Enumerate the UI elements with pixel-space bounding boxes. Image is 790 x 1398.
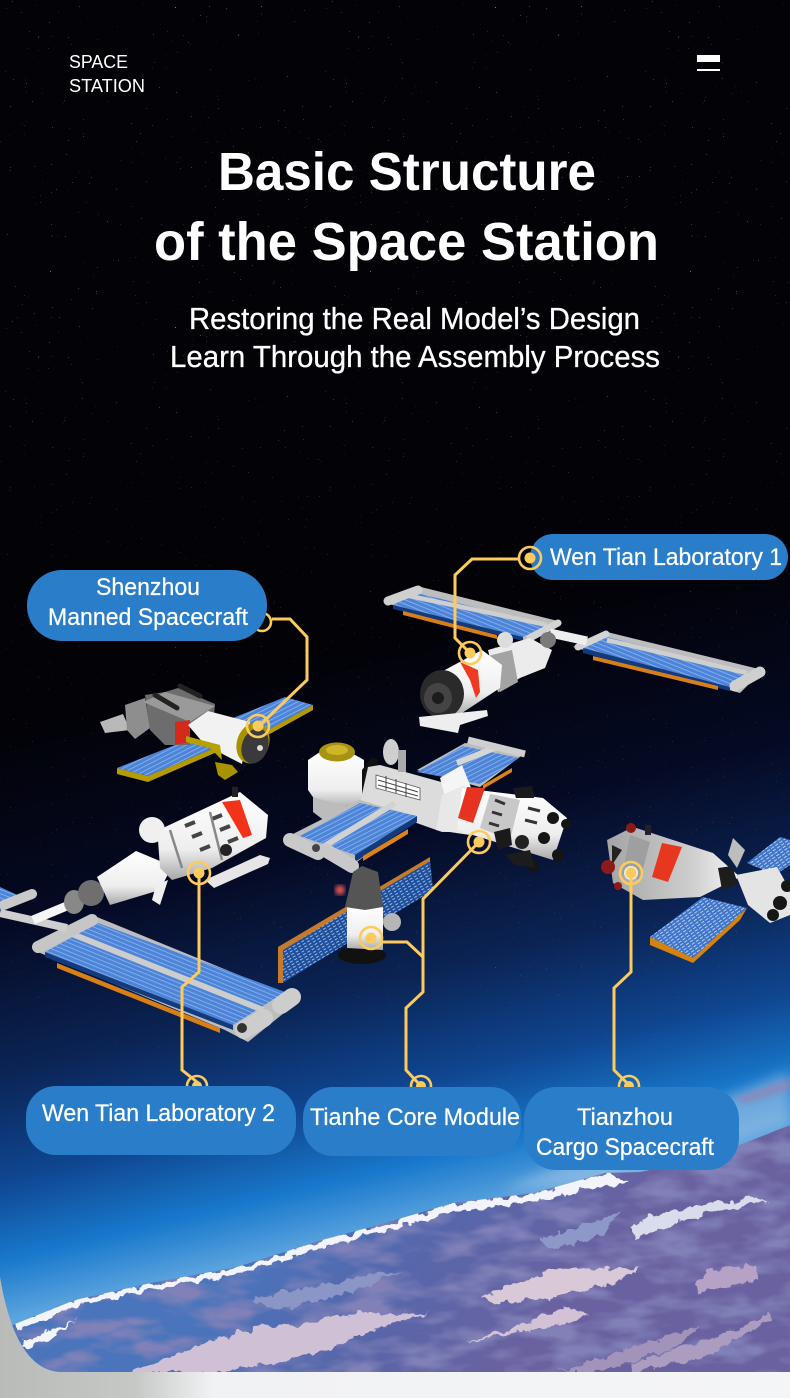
model: Tianzhou Cargo Spacecraft <box>601 823 790 963</box>
model: Wen Tian Laboratory 2 <box>0 787 300 1042</box>
label: Tianhe Core Module: Tianhe Core Module <box>310 1104 520 1131</box>
subtitle: Learn Through the Assembly Process <box>170 339 660 374</box>
leader lines <box>182 559 642 1096</box>
title <box>154 142 659 272</box>
model: small solar array module <box>278 857 433 983</box>
title: of the Space Station <box>154 212 659 272</box>
icon: menu bars <box>697 55 720 71</box>
model: Tianhe Core Module <box>287 739 571 872</box>
brand label: STATION <box>69 76 145 96</box>
title: Basic Structure <box>218 142 596 202</box>
label: Wen Tian Laboratory 2 <box>26 1086 296 1155</box>
label: Shenzhou Manned Spacecraft: Manned Spacecraft <box>48 604 248 631</box>
label: Tianhe Core Module <box>303 1087 521 1156</box>
brand label: SPACE <box>69 52 128 72</box>
label: Tianzhou Cargo Spacecraft <box>524 1087 739 1170</box>
label: Shenzhou Manned Spacecraft: Shenzhou <box>96 574 200 601</box>
subtitle: Restoring the Real Model’s Design <box>189 301 640 336</box>
label: Wen Tian Laboratory 2: Wen Tian Laboratory 2 <box>42 1100 275 1127</box>
subtitle <box>170 301 660 374</box>
label: Tianzhou Cargo Spacecraft: Tianzhou <box>577 1104 673 1131</box>
brand label <box>69 52 145 96</box>
label: Wen Tian Laboratory 1 <box>519 534 788 580</box>
label: Tianzhou Cargo Spacecraft: Cargo Spacecraft <box>536 1134 714 1161</box>
label: Shenzhou Manned Spacecraft <box>27 570 267 641</box>
model: Shenzhou Manned Spacecraft <box>100 686 313 782</box>
label: Wen Tian Laboratory 1: Wen Tian Laboratory 1 <box>550 544 782 571</box>
model: Wen Tian Laboratory 1 <box>385 586 763 733</box>
